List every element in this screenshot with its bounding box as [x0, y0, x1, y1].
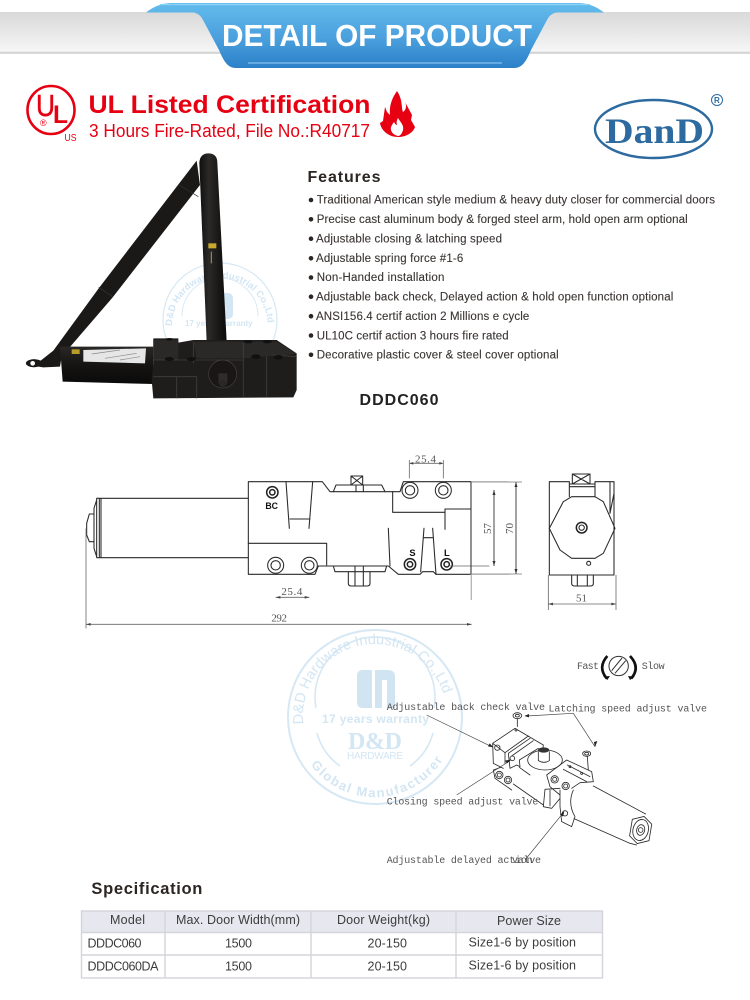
forearm — [26, 161, 200, 367]
watermark: product photo: D&D Hardware Industrial Co.,Ltd — [165, 272, 275, 326]
features list: Adjustable back check, Delayed action & hold open function optional — [316, 291, 673, 303]
main arm — [199, 153, 227, 342]
features list: Adjustable closing & latching speed — [316, 233, 502, 245]
valve labels: BC — [265, 501, 278, 511]
screws — [513, 713, 591, 770]
icon: UL logo: U — [36, 88, 55, 123]
technical drawing: front view — [86, 454, 510, 628]
features list — [309, 195, 715, 362]
valve adjustment diagram — [493, 713, 654, 846]
valve labels: valve — [512, 855, 541, 867]
mounting holes — [268, 482, 451, 573]
icon: flame — [380, 91, 415, 137]
table row: DDDC060DA: 20-150 — [368, 960, 407, 974]
model number: DDDC060 — [360, 392, 439, 409]
table header: Door Weight(kg) — [337, 913, 430, 927]
valve labels: S — [409, 548, 416, 558]
dimension: height 57 and 70: 57 — [482, 522, 494, 534]
features list: ANSI156.4 certif action 2 Millions e cycle — [316, 311, 529, 323]
DanD logo: DanD — [605, 111, 704, 151]
header banner — [0, 3, 750, 68]
cylinder — [87, 498, 248, 558]
features list: Traditional American style medium & heavy duty closer for commercial doors — [317, 195, 715, 207]
watermark: lower diagram: HARDWARE — [347, 751, 403, 762]
speed direction icon — [602, 656, 636, 680]
table row: DDDC060 — [88, 936, 576, 950]
features list: Non-Handed installation — [317, 272, 444, 284]
specification heading: Specification — [91, 880, 202, 898]
icon: UL logo — [28, 86, 77, 144]
valve labels: Fast — [577, 662, 599, 673]
title: DETAIL OF PRODUCT — [222, 18, 532, 53]
table header: Max. Door Width(mm) — [176, 913, 300, 927]
icon: UL logo: US — [64, 133, 77, 144]
dimension: height 57 and 70 — [471, 482, 522, 600]
DanD logo — [595, 94, 722, 158]
technical drawing: side view — [548, 474, 616, 610]
central spindle — [528, 750, 562, 770]
features list: Adjustable spring force #1-6 — [316, 253, 463, 265]
valve labels: Closing speed adjust valve — [387, 797, 538, 809]
product photo: door closer — [26, 153, 297, 398]
table row: DDDC060: Size1-6 by position — [468, 936, 576, 950]
body outline — [248, 482, 471, 574]
valve labels — [387, 661, 707, 867]
left block — [493, 728, 543, 790]
dimension lines: 25.4 — [281, 586, 303, 598]
watermark: lower diagram: D&D — [348, 729, 402, 755]
watermark: lower diagram: 17 years warranty — [322, 712, 429, 726]
right block — [543, 760, 593, 827]
watermark: product photo: 17 years warranty — [185, 319, 253, 328]
specification table — [82, 911, 602, 978]
dimension: height 57 and 70: 70 — [504, 522, 516, 534]
features list: Precise cast aluminum body & forged steel arm, hold open arm optional — [317, 214, 688, 226]
table row: DDDC060: 20-150 — [368, 936, 407, 950]
certification heading: UL Listed Certification — [88, 91, 371, 119]
table row: DDDC060: 1500 — [225, 936, 252, 950]
valve labels: Slow — [642, 661, 665, 673]
valve labels — [265, 501, 450, 558]
features list: Decorative plastic cover & steel cover optional — [317, 350, 559, 362]
dimension lines — [86, 454, 510, 628]
valve labels: Adjustable back check valve — [387, 702, 545, 714]
valve labels: L — [444, 548, 450, 558]
DanD logo: R — [714, 96, 720, 105]
table header: Power Size — [497, 914, 561, 928]
features heading: Features — [308, 169, 381, 186]
body — [152, 338, 297, 398]
bottom bolt — [333, 566, 387, 586]
watermark: lower diagram: Global Manufacturer — [312, 756, 442, 798]
table header — [110, 913, 561, 928]
dimension lines: 25.4 — [415, 454, 436, 466]
table header: Model — [110, 913, 145, 927]
table row: DDDC060DA: 1500 — [225, 960, 252, 974]
features list: UL10C certif action 3 hours fire rated — [317, 330, 509, 342]
dimension lines: 292 — [271, 613, 287, 625]
table row: DDDC060DA — [88, 958, 576, 974]
cylinder — [574, 786, 646, 845]
icon: UL logo: ® — [40, 118, 47, 128]
top bracket — [333, 476, 385, 492]
valve screws — [267, 487, 452, 570]
watermark: lower diagram — [287, 629, 463, 805]
watermark: lower diagram: D&D Hardware Industrial Co.,Ltd — [293, 634, 453, 724]
valve labels: Adjustable delayed action — [387, 855, 533, 867]
valve labels: Latching speed adjust valve — [548, 704, 707, 716]
table row: DDDC060: DDDC060 — [88, 936, 142, 950]
table row: DDDC060DA: Size1-6 by position — [468, 958, 576, 972]
certification subheading: 3 Hours Fire-Rated, File No.:R40717 — [89, 121, 370, 141]
leader lines — [427, 713, 597, 860]
technical drawing: side view: 51 — [576, 593, 587, 605]
table row: DDDC060DA: DDDC060DA — [88, 960, 159, 974]
icon: UL logo: L — [53, 101, 68, 129]
cylinder — [60, 347, 153, 384]
